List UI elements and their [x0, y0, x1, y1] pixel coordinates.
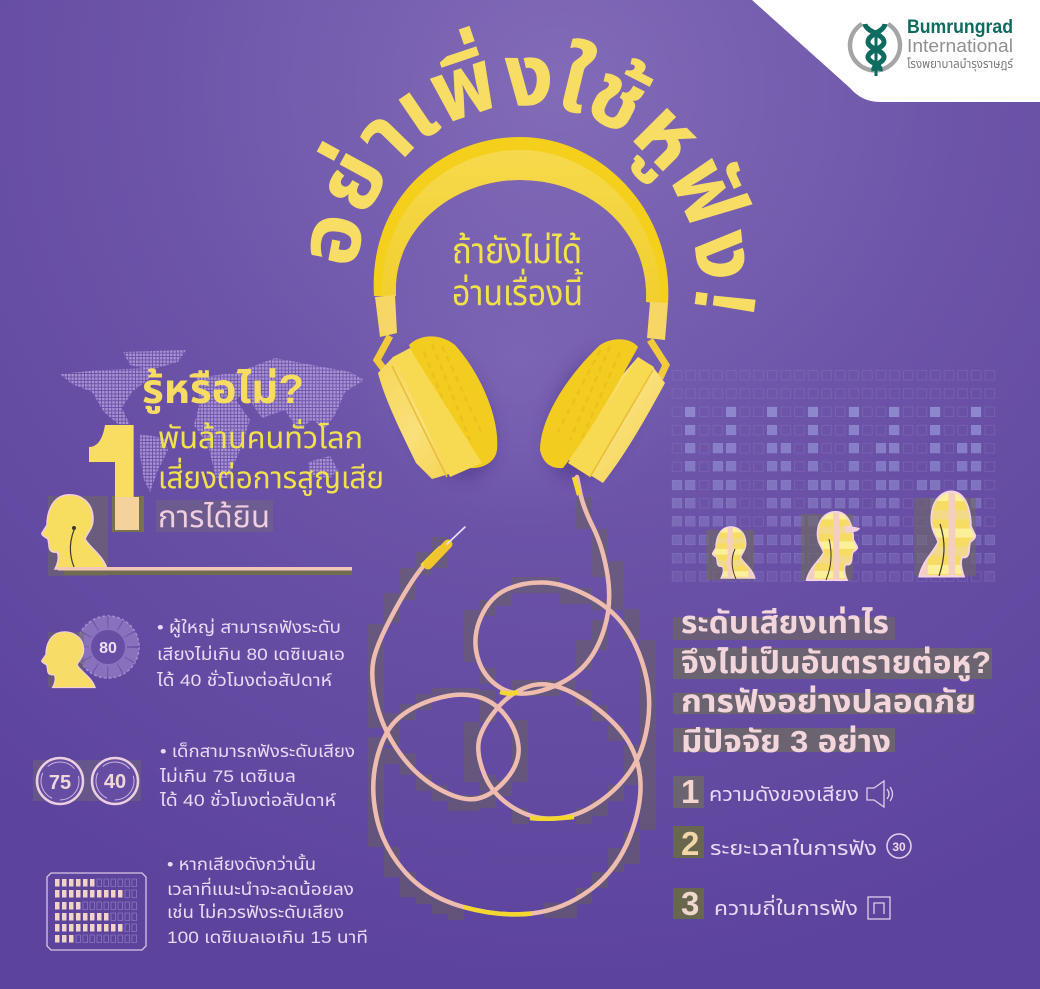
icon: 75 dB ring: 75 — [49, 772, 71, 794]
left slider and hinge — [375, 295, 397, 372]
right heading: จึงไม่เป็นอันตรายต่อหู? — [681, 645, 991, 681]
factor 2: 2 — [681, 825, 699, 862]
equalizer grid — [671, 370, 997, 582]
factor 3: ความถี่ในการฟัง — [714, 894, 858, 920]
louder sound text — [167, 853, 368, 947]
factor 3 — [673, 885, 890, 922]
child limit text — [159, 742, 355, 810]
icon: level meter — [47, 873, 146, 950]
audio jack — [428, 527, 465, 565]
logo text: โรงพยาบาลบำรุงราษฎร์ — [907, 57, 1014, 71]
child limit text: ได้ 40 ชั่วโมงต่อสัปดาห์ — [159, 789, 336, 810]
adult limit text: เสียงไม่เกิน 80 เดซิเบลเอ — [157, 645, 345, 664]
world map — [60, 350, 364, 492]
logo panel — [752, 0, 1040, 102]
louder sound text: เช่น ไม่ควรฟังระดับเสียง — [167, 903, 344, 922]
hearing loss statement: พันล้านคนทั่วโลก — [158, 419, 363, 455]
icon: 40 hours ring: 40 — [104, 771, 126, 793]
subtitle — [452, 230, 583, 313]
head: adult — [914, 492, 976, 576]
left ear cup — [378, 336, 497, 479]
hearing loss statement — [156, 419, 384, 534]
hearing loss statement: การได้ยิน — [158, 501, 270, 534]
factor 3: 3 — [681, 885, 699, 922]
right heading: มีปัจจัย 3 อย่าง — [681, 724, 891, 759]
adult limit row — [42, 616, 345, 690]
adult limit text — [156, 617, 345, 690]
right ear cup — [540, 339, 665, 483]
icon: speaker — [867, 781, 892, 807]
big number 1: 1 — [77, 362, 163, 573]
factor 2 — [673, 825, 911, 862]
logo text: Bumrungrad — [907, 17, 1013, 38]
factor 1 — [673, 773, 892, 810]
icon: 80 dB dial: 80 — [99, 640, 117, 657]
adult limit text: ได้ 40 ชั่วโมงต่อสัปดาห์ — [156, 669, 332, 690]
louder sound row — [47, 853, 368, 950]
subtitle: อ่านเรื่องนี้ — [452, 268, 583, 313]
logo text: International — [907, 36, 1013, 56]
icon: rewind 30: 30 — [892, 840, 906, 854]
did you know heading: รู้หรือไม่? — [142, 366, 304, 414]
child limit text: ไม่เกิน 75 เดซิเบล — [159, 767, 296, 786]
big number 1 — [89, 425, 144, 532]
right slider and hinge — [647, 302, 668, 378]
icon: 75 dB ring — [37, 758, 83, 804]
louder sound text: • หากเสียงดังกว่านั้น — [167, 853, 316, 874]
right heading: การฟังอย่างปลอดภัย — [681, 684, 976, 719]
factor 2: ระยะเวลาในการฟัง — [710, 838, 877, 860]
logo icon: caduceus — [850, 24, 900, 76]
title: อย่าเพิ่งใช้หูฟัง! — [310, 26, 756, 312]
logo text — [907, 17, 1014, 71]
audio cord — [368, 477, 656, 920]
icon: listener head with rule — [42, 495, 352, 576]
subtitle: ถ้ายังไม่ได้ — [452, 230, 582, 271]
right heading — [673, 605, 992, 759]
headphones — [374, 137, 668, 493]
head: child — [706, 527, 755, 580]
icon: rewind 30 — [887, 834, 911, 858]
icon: adult head — [42, 632, 95, 688]
icon: three heads — [706, 492, 976, 580]
icon: 80 dB dial — [77, 616, 139, 678]
right heading: ระดับเสียงเท่าไร — [681, 605, 889, 640]
louder sound text: เวลาที่แนะนำจะลดน้อยลง — [167, 877, 354, 899]
head: teen with cap — [801, 512, 860, 580]
icon: music note box — [868, 897, 890, 919]
louder sound text: 100 เดซิเบลเอเกิน 15 นาที — [167, 928, 368, 947]
icon: 40 hours ring — [92, 758, 138, 804]
hearing loss statement: เสี่ยงต่อการสูญเสีย — [158, 457, 384, 496]
child limit text: • เด็กสามารถฟังระดับเสียง — [160, 742, 355, 761]
headband — [374, 137, 668, 304]
factor 1: 1 — [681, 773, 699, 810]
factor 1: ความดังของเสียง — [709, 784, 859, 806]
adult limit text: • ผู้ใหญ่ สามารถฟังระดับ — [157, 617, 341, 639]
child limit row — [33, 742, 355, 810]
